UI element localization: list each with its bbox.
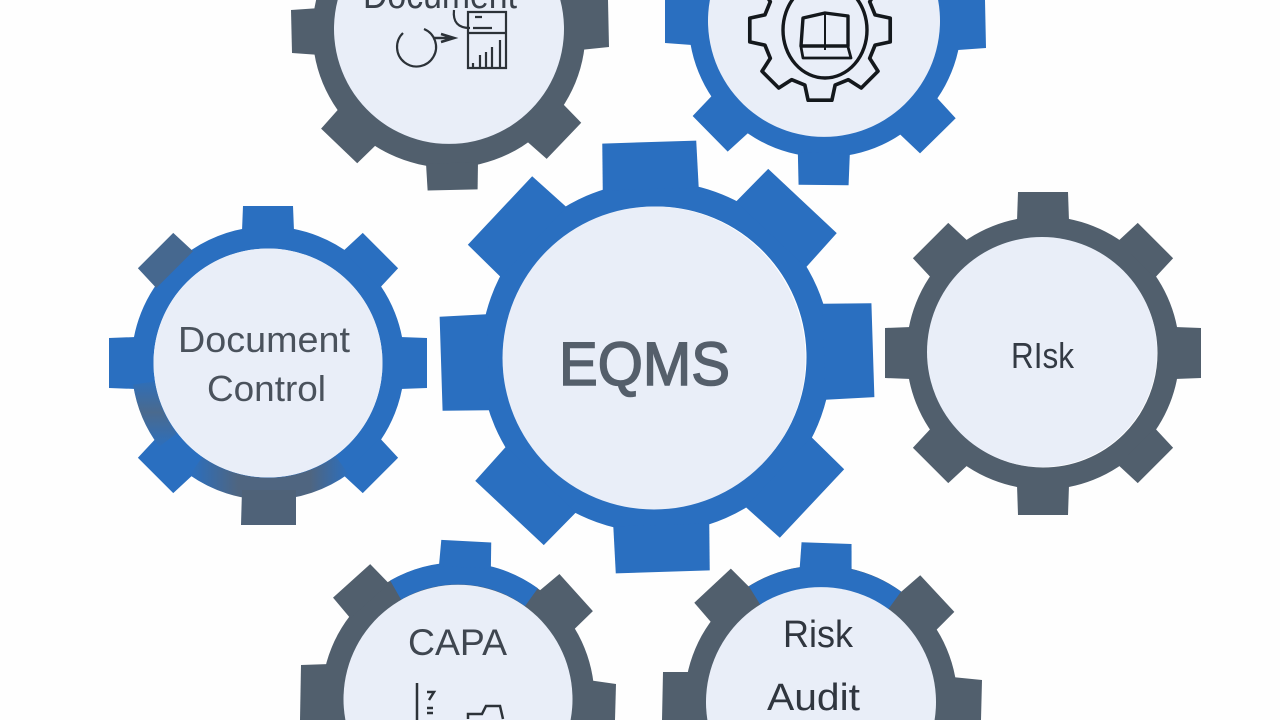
gear: central EQMS (434, 135, 880, 579)
icon: gear with book (750, 0, 890, 100)
icon: chart and tool (417, 683, 503, 720)
label: Risk Audit: Risk (783, 614, 854, 656)
label: Document Control: Document (178, 319, 350, 360)
gear: CAPA (300, 534, 616, 720)
gear: Risk Audit (662, 539, 982, 720)
gear hub: Risk (927, 237, 1157, 467)
gear: top-right book icon (665, 0, 986, 186)
icon: cycle arrow to document chart (397, 10, 506, 68)
label: Risk Audit: Audit (767, 677, 860, 719)
ring shading: bottom dark arc (196, 465, 342, 489)
gear hub: top-left (334, 0, 564, 144)
label: Risk: RIsk (1011, 335, 1075, 376)
ring shading: left dark arc (144, 383, 168, 440)
label: Document Control: Control (207, 368, 326, 409)
gear hub: EQMS (502, 206, 806, 510)
label: Risk Audit (767, 614, 860, 719)
gear: top-left Document (291, 0, 609, 193)
gear: Risk (885, 192, 1201, 515)
gear hub: Document Control (154, 248, 382, 478)
label: Document Control (178, 319, 350, 409)
gear hub: top-right (708, 0, 940, 137)
gear hub: Risk Audit (706, 587, 936, 720)
gear hub: CAPA (344, 585, 572, 720)
tooth: bottom dark (241, 490, 296, 525)
label: CAPA: CAPA (408, 622, 507, 663)
gear: Document Control (109, 206, 427, 525)
label: EQMS: EQMS (559, 330, 730, 398)
